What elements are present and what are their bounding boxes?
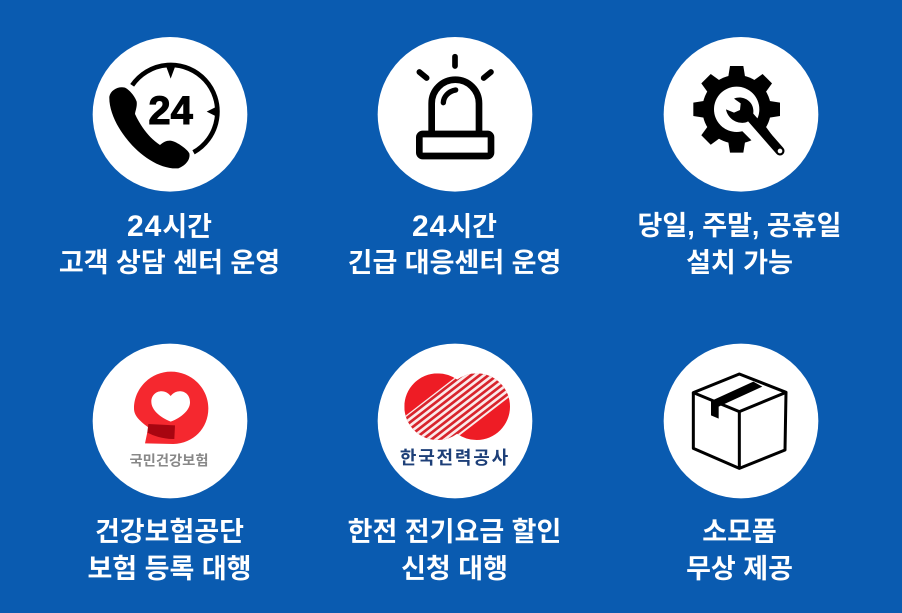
icon: phone with 24 clock: 24 — [148, 89, 194, 133]
icon: gear and wrench — [664, 37, 818, 192]
caption: 긴급 대응센터 운영 — [348, 248, 561, 278]
caption: 무상 제공 — [686, 554, 793, 584]
icon: siren — [378, 37, 532, 192]
caption: 24시간 — [412, 210, 497, 243]
panel: free consumables — [664, 344, 818, 584]
icon: NHIS logo: 국민건강보험 — [129, 453, 209, 470]
icon: box — [664, 344, 818, 498]
icon: phone with 24 clock — [92, 37, 248, 192]
panel: 24h emergency center — [348, 37, 561, 278]
icon: NHIS logo — [92, 344, 248, 498]
caption: 신청 대행 — [401, 554, 508, 584]
panel: KEPCO discount — [348, 344, 561, 584]
caption — [638, 211, 841, 278]
caption — [348, 517, 561, 584]
caption: 보험 등록 대행 — [87, 554, 252, 584]
panel: 24h customer service — [59, 37, 280, 278]
caption: 당일, 주말, 공휴일 — [638, 211, 841, 241]
caption — [59, 210, 280, 278]
caption — [87, 517, 252, 584]
caption: 고객 상담 센터 운영 — [59, 248, 280, 278]
panel: health insurance — [87, 344, 252, 584]
panel: same-day installation — [638, 37, 841, 278]
caption — [348, 210, 561, 278]
caption: 24시간 — [127, 210, 212, 243]
icon: KEPCO logo — [378, 344, 532, 498]
caption: 소모품 — [702, 517, 777, 547]
icon: KEPCO logo: 한국전력공사 — [400, 448, 509, 468]
caption: 건강보험공단 — [95, 517, 244, 547]
caption — [686, 517, 793, 584]
caption: 설치 가능 — [686, 248, 793, 278]
caption: 한전 전기요금 할인 — [348, 517, 561, 547]
